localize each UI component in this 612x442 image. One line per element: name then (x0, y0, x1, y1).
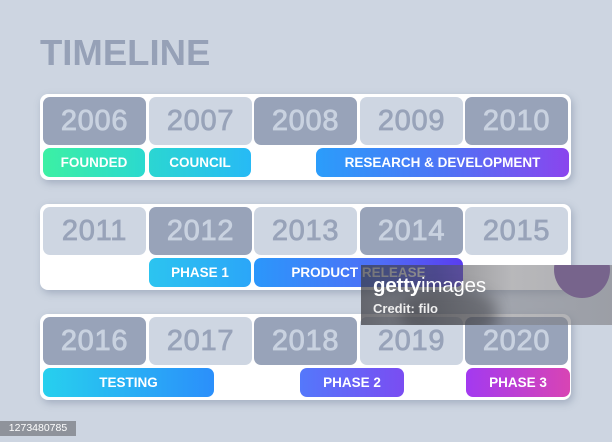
year 2007: 2007 (167, 105, 234, 137)
year 2015: 2015 (483, 215, 550, 247)
year 2017 (149, 317, 252, 365)
bar: phase 3: PHASE 3 (489, 375, 547, 390)
year 2016: 2016 (61, 325, 128, 357)
year 2012 (149, 207, 252, 255)
year 2019 (360, 317, 463, 365)
bar: phase 2 (300, 368, 404, 397)
bar: council (149, 148, 251, 177)
year 2012: 2012 (167, 215, 234, 247)
year 2018: 2018 (272, 325, 339, 357)
year 2013: 2013 (272, 215, 339, 247)
year 2020: 2020 (483, 325, 550, 357)
bar: founded: FOUNDED (61, 155, 127, 170)
year 2016 (43, 317, 146, 365)
year 2008: 2008 (272, 105, 339, 137)
year 2010: 2010 (483, 105, 550, 137)
bar: founded (43, 148, 145, 177)
title: TIMELINE (40, 32, 210, 73)
image id label (0, 421, 76, 436)
year 2013 (254, 207, 357, 255)
bar: phase 3 (466, 368, 570, 397)
year 2006 (43, 97, 146, 145)
year 2009 (360, 97, 463, 145)
watermark shading (401, 289, 496, 339)
year 2010 (465, 97, 568, 145)
year 2009: 2009 (378, 105, 445, 137)
year 2019: 2019 (378, 325, 445, 357)
year 2008 (254, 97, 357, 145)
bar: product release (254, 258, 463, 287)
year 2020 (465, 317, 568, 365)
year 2006: 2006 (61, 105, 128, 137)
year 2014: 2014 (378, 215, 445, 247)
bar: council: COUNCIL (169, 155, 231, 170)
watermark logo: gettyimages (373, 274, 486, 297)
year 2018 (254, 317, 357, 365)
year 2011 (43, 207, 146, 255)
year 2011: 2011 (62, 215, 127, 247)
panel: 2016-2020 timeline row (40, 314, 571, 400)
bar: phase 1 (149, 258, 251, 287)
bar: product release: PRODUCT RELEASE (291, 265, 426, 280)
bar: phase 1: PHASE 1 (171, 265, 229, 280)
watermark: getty images (361, 265, 612, 325)
year 2015 (465, 207, 568, 255)
watermark circle (554, 241, 610, 298)
bar: testing: TESTING (99, 375, 158, 390)
year 2017: 2017 (167, 325, 234, 357)
bar: phase 2: PHASE 2 (323, 375, 381, 390)
bar: research and development: RESEARCH & DEVELOPMENT (345, 155, 540, 170)
panel: 2011-2015 timeline row (40, 204, 571, 290)
watermark credit: Credit: filo (373, 301, 438, 316)
bar: testing (43, 368, 214, 397)
panel: 2006-2010 timeline row (40, 94, 571, 180)
year 2007 (149, 97, 252, 145)
image id label: 1273480785 (9, 422, 67, 434)
bar: research and development (316, 148, 569, 177)
year 2014 (360, 207, 463, 255)
